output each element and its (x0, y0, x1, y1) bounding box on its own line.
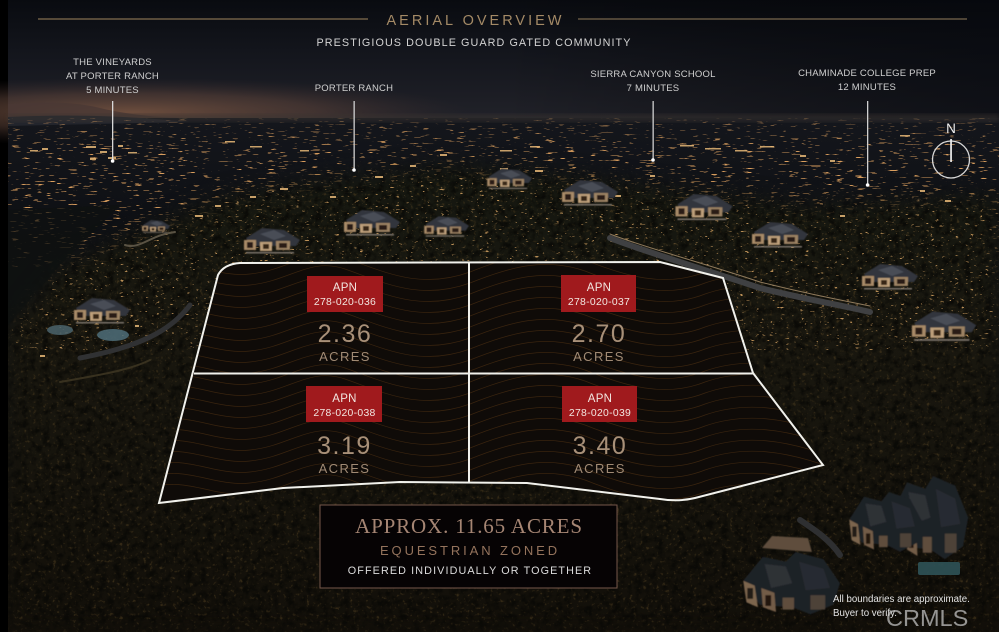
parcel 037: 278-020-037 (568, 297, 630, 308)
title band (38, 13, 967, 49)
parcel 039: ACRES (574, 461, 626, 476)
parcel 038: 278-020-038 (313, 408, 376, 419)
location marker: The Vineyards: THE VINEYARDS (73, 57, 152, 68)
callout: total acreage: OFFERED INDIVIDUALLY OR TOGETHER (348, 565, 592, 577)
estate pools (47, 325, 73, 335)
sky (8, 0, 999, 125)
parcel 039: APN (588, 393, 612, 405)
disclaimer: Buyer to verify. (833, 608, 897, 619)
location marker: Sierra Canyon School (590, 69, 716, 162)
foreground estate pool (918, 562, 960, 575)
location marker: The Vineyards: AT PORTER RANCH (66, 71, 159, 82)
location marker: Sierra Canyon School: 7 MINUTES (627, 83, 679, 94)
location marker: The Vineyards: 5 MINUTES (86, 85, 139, 96)
distant mountains (8, 103, 180, 118)
horizon haze (8, 114, 999, 122)
CRMLS watermark: CRMLS (886, 605, 968, 631)
parcel 038: ACRES (319, 461, 370, 476)
subtitle: PRESTIGIOUS DOUBLE GUARD GATED COMMUNITY (317, 37, 631, 49)
dark slope lower left (8, 205, 120, 325)
disclaimer: All boundaries are approximate. (833, 594, 970, 605)
parcel 037 (561, 275, 636, 364)
lit clusters near the village (30, 135, 951, 357)
parcel 038 (306, 386, 382, 476)
callout: total acreage: APPROX. 11.65 ACRES (355, 514, 583, 538)
location marker: The Vineyards (66, 57, 159, 163)
parcel 038: 3.19 (317, 432, 372, 460)
sunset glow (0, 78, 470, 146)
parcel 039: 278-020-039 (569, 408, 631, 419)
callout: total acreage: EQUESTRIAN ZONED (380, 543, 560, 558)
right title rule (578, 18, 967, 20)
distant city lights (8, 118, 999, 268)
parcel 036: ACRES (319, 349, 371, 364)
parcel boundaries (159, 262, 823, 503)
parcel 037: APN (587, 282, 611, 294)
parcel 039: 3.40 (573, 432, 627, 460)
location marker: Porter Ranch: PORTER RANCH (315, 83, 393, 94)
parcel map (150, 253, 840, 510)
foreground mansions (743, 476, 968, 614)
location marker: Chaminade College Prep (798, 68, 936, 187)
houses (74, 169, 976, 341)
parcel 037: ACRES (573, 349, 625, 364)
parcel 039 (562, 386, 637, 476)
hillside (8, 140, 999, 632)
location marker: Chaminade College Prep: 12 MINUTES (838, 82, 896, 93)
icon: north compass: N (946, 121, 956, 136)
parcel 036: 278-020-036 (314, 297, 376, 308)
parcel 038: APN (332, 393, 357, 405)
callout: total acreage (320, 505, 617, 588)
parcel 036: 2.36 (318, 320, 372, 348)
parcel ground with contour lines (162, 263, 822, 502)
parcel 036 (307, 276, 383, 364)
sky darkening to the right (8, 0, 999, 125)
location marker: Chaminade College Prep: CHAMINADE COLLEGE PREP (798, 68, 936, 79)
parcel 037: 2.70 (572, 320, 626, 348)
left title rule (38, 18, 368, 20)
icon: north compass (932, 121, 970, 178)
parcel 036: APN (333, 282, 357, 294)
disclaimer (833, 594, 970, 619)
roads (60, 232, 870, 555)
location marker: Porter Ranch (315, 83, 393, 172)
title: AERIAL OVERVIEW (387, 13, 564, 29)
location marker: Sierra Canyon School: SIERRA CANYON SCHOOL (590, 69, 716, 80)
